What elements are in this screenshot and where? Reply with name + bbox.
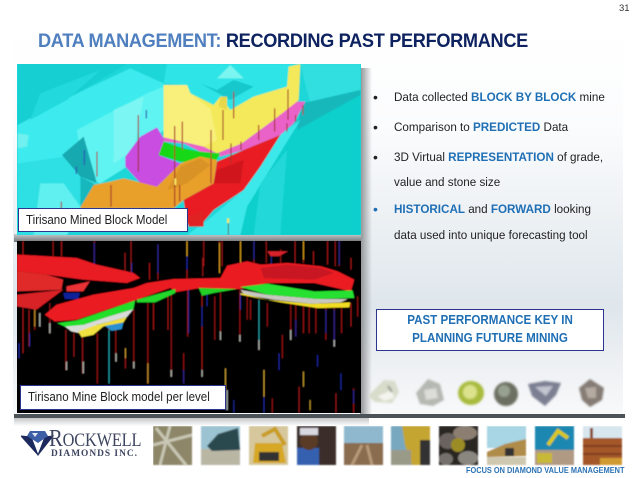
- callout: [376, 309, 604, 351]
- label: Tirisano Mined Block Model: [18, 208, 188, 232]
- bullet 3: [373, 149, 603, 189]
- bullet 2: Comparison to PREDICTED Data: [394, 120, 568, 134]
- logo subtitle: DIAMONDS INC.: [51, 449, 138, 459]
- bullet 4: •: [373, 201, 378, 217]
- bullet 2: •: [373, 119, 378, 135]
- label: Tirisano Mine Block model per level: [20, 385, 226, 410]
- page number: 31: [619, 3, 630, 14]
- label: Tirisano Mine Block model per level: Tirisano Mine Block model per level: [28, 389, 210, 404]
- title: DATA MANAGEMENT: RECORDING PAST PERFORMANCE: [38, 30, 528, 52]
- bullet 1: Data collected BLOCK BY BLOCK mine: [394, 90, 605, 104]
- gap shadow between images: [14, 234, 361, 242]
- tagline: FOCUS ON DIAMOND VALUE MANAGEMENT: [466, 465, 624, 475]
- callout: PAST PERFORMANCE KEY IN: [407, 313, 573, 327]
- shadow under images: [14, 418, 369, 426]
- photo strip: [153, 426, 623, 466]
- bullet 3: •: [373, 149, 378, 165]
- bullet list: [373, 89, 605, 242]
- icons: rough diamonds: [369, 378, 605, 408]
- image: Tirisano mined block model: [17, 64, 361, 235]
- bullet 3: 3D Virtual REPRESENTATION of grade,: [394, 150, 603, 164]
- panel shadow beside images: [360, 68, 372, 414]
- divider bar: [14, 414, 625, 418]
- logo: Rockwell Diamonds: [21, 426, 141, 459]
- panel: background gradient: [13, 28, 623, 415]
- callout: PLANNING FUTURE MINING: [412, 330, 568, 344]
- bullet 4: [373, 201, 591, 242]
- bullet 4: HISTORICAL and FORWARD looking: [394, 202, 591, 216]
- logo mark: [21, 431, 54, 456]
- bullet 4: data used into unique forecasting tool: [394, 228, 588, 242]
- bullet 3: value and stone size: [394, 175, 500, 189]
- bullet 1: •: [373, 89, 378, 105]
- image: block model per level: [17, 241, 361, 413]
- logo wordmark: ROCKWELL: [49, 426, 141, 452]
- label: Tirisano Mined Block Model: Tirisano Mined Block Model: [26, 212, 167, 227]
